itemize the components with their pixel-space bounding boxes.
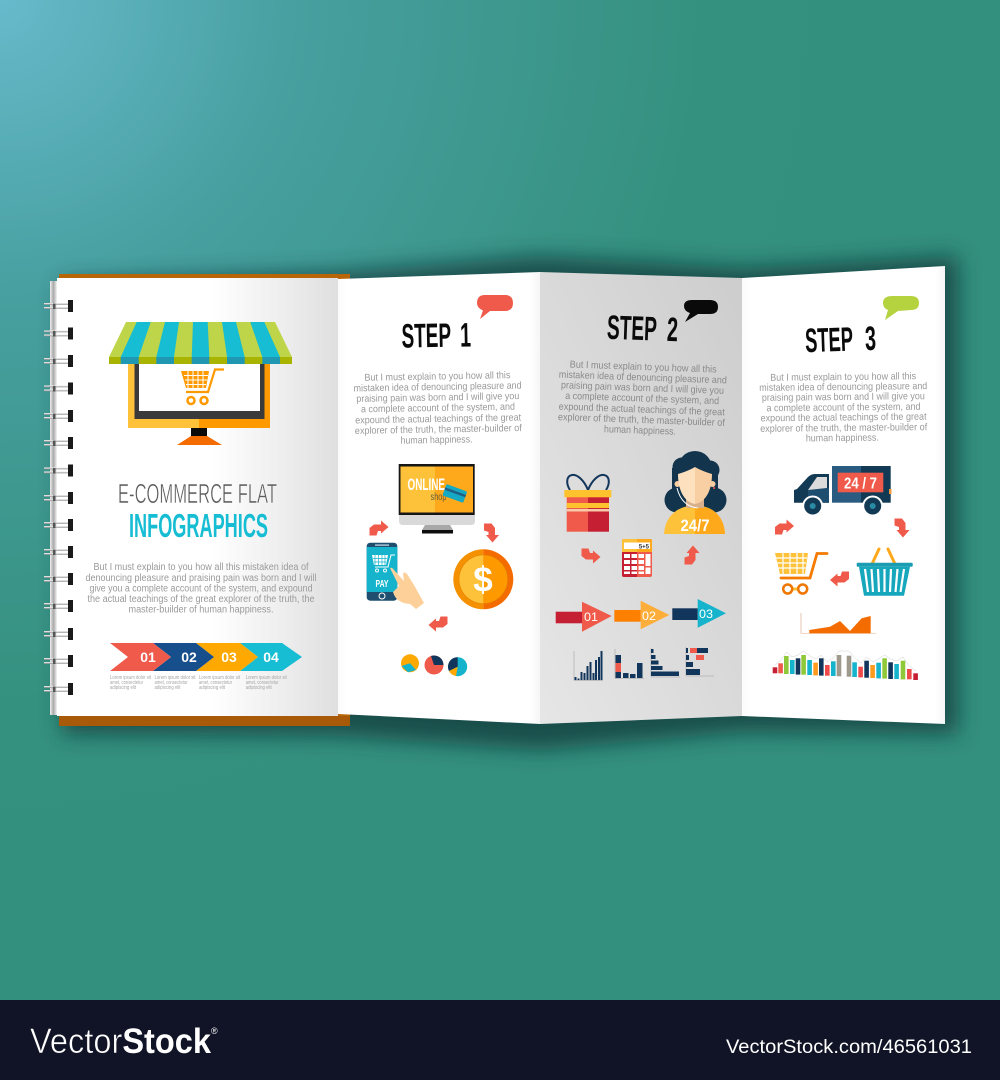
heading: step 2: STEP (606, 309, 658, 349)
spiral binding (44, 300, 73, 695)
pie charts (401, 654, 467, 676)
icon: shop monitor (109, 322, 292, 445)
text block: step 3 (759, 371, 928, 445)
arrow (830, 572, 849, 586)
text block: step 3: mistaken idea of denouncing pleasure and (759, 381, 927, 394)
chevron captions: Lorem ipsum dolor sit (110, 675, 152, 681)
numbered arrow 02: 02 (642, 609, 656, 623)
numbered arrow 01 (556, 602, 612, 632)
icon: calculator: 5+5 (639, 544, 650, 550)
icon: green speech bubble (883, 296, 919, 320)
heading: step 3: STEP (804, 321, 854, 360)
arrow (684, 546, 700, 564)
icon: phone with hand: PAY (376, 579, 389, 590)
text block: step 2: a complete account of the system, and (565, 391, 719, 407)
text block: intro: give you a complete account of the system, and expound (90, 584, 312, 594)
icon: cart (181, 370, 224, 404)
logo registered mark: ® (211, 1026, 218, 1036)
footer bar (0, 1000, 1000, 1080)
icon: support agent (664, 451, 726, 535)
chevron steps: 01 (140, 649, 156, 665)
image id: VectorStock.com/46561031 (726, 1036, 972, 1058)
panel: step 1 (338, 272, 540, 724)
icon: online shop monitor: ONLINE (408, 476, 445, 494)
chevron captions: adipiscing elit (154, 685, 181, 691)
text block: step 1: a complete account of the system, and (361, 402, 515, 415)
bar chart 2 (615, 649, 644, 678)
icon: calculator (622, 539, 652, 577)
text block: intro (86, 562, 316, 616)
text block: step 3: expound the actual teachings of the great (761, 412, 927, 424)
text block: step 1: human happiness. (400, 434, 473, 447)
chevron steps (110, 643, 302, 671)
left page (57, 278, 338, 716)
chevron captions: adipiscing elit (110, 685, 137, 691)
icon: black speech bubble (684, 300, 718, 322)
numbered arrow 03: 03 (699, 607, 713, 621)
chevron captions: amet, consectetur (199, 680, 232, 686)
icon: hand (390, 568, 424, 609)
chevron captions: amet, consectetur (154, 680, 188, 686)
icon: dollar coin: $ (473, 560, 493, 600)
logo: VectorStock: VectorStock (30, 1022, 211, 1061)
text block: intro: the actual teachings of the great explorer of the truth, the (88, 594, 315, 605)
icon: gift (564, 475, 611, 532)
icon: dollar coin (453, 549, 513, 609)
text block: step 1: explorer of the truth, the master-builder of (355, 423, 522, 437)
text block: step 3: a complete account of the system, and (766, 402, 921, 414)
numbered arrow 03 (672, 599, 726, 628)
heading: step 1: 1 (460, 316, 471, 355)
text block: step 2: expound the actual teachings of the great (559, 402, 725, 418)
chevron captions: amet, consectetur (110, 680, 143, 686)
icon: basket (857, 549, 913, 596)
icon: online shop monitor: shop (430, 492, 447, 503)
text block: intro: But I must explain to you how all this mistaken idea of (94, 562, 309, 573)
heading: infographics: INFOGRAPHICS (129, 507, 268, 544)
icon: awning (109, 322, 292, 364)
notebook cover (59, 274, 350, 726)
icon: online shop monitor (399, 464, 475, 534)
icon: delivery truck (794, 466, 892, 516)
page stack (50, 281, 57, 715)
text block: step 3: human happiness. (806, 433, 879, 444)
chevron steps: 04 (263, 649, 279, 665)
text block: step 2: But I must explain to you how all this (570, 359, 717, 376)
icon: shopping cart (775, 553, 827, 594)
panel: step 3 (742, 266, 945, 724)
arrow (370, 520, 388, 536)
text block: step 2 (557, 359, 727, 439)
chevron captions: Lorem ipsum dolor sit (246, 675, 287, 681)
brochure shadow (62, 256, 958, 750)
arrow (775, 520, 794, 534)
heading: step 2: 2 (666, 311, 679, 349)
icon: support agent: 24/7 (680, 516, 710, 535)
heading: step 1: STEP (401, 317, 451, 356)
chevron captions: amet, consectetur (246, 680, 279, 686)
bar chart 4 (686, 647, 714, 676)
icon: red speech bubble (477, 295, 513, 319)
arrow (484, 524, 499, 542)
notebook (44, 274, 350, 726)
chevron captions: Lorem ipsum dolor sit (199, 675, 241, 681)
chevron captions: Lorem ipsum dolor sit (154, 675, 196, 681)
chevron captions: adipiscing elit (246, 685, 272, 691)
chevron captions (110, 675, 287, 691)
area chart (801, 613, 876, 634)
bar chart: multicolor (773, 651, 918, 680)
bar chart 3 (651, 648, 680, 677)
text block: intro: master-builder of human happiness. (128, 604, 274, 616)
text block: step 2: human happiness. (604, 424, 676, 438)
text block: step 3: But I must explain to you how all this (770, 371, 916, 384)
icon: phone with hand (367, 543, 424, 609)
arrow (894, 518, 910, 538)
icon: delivery truck: 24 / 7 (844, 476, 877, 492)
arrow (582, 548, 600, 564)
text block: step 1 (353, 370, 523, 447)
text block: step 2: praising pain was born and I will give you (561, 380, 724, 397)
arrow (428, 616, 448, 632)
text block: step 1: mistaken idea of denouncing pleasure and (354, 381, 522, 394)
chevron steps: 02 (181, 649, 197, 665)
heading: e-commerce flat: E-COMMERCE FLAT (118, 478, 277, 509)
numbered arrow 01: 01 (584, 610, 598, 624)
chevron steps: 03 (221, 649, 237, 665)
text block: step 1: praising pain was born and I will give you (356, 391, 519, 405)
panel: step 2 (540, 272, 742, 724)
text block: step 1: expound the actual teachings of the great (355, 413, 521, 426)
text block: intro: denouncing pleasure and praising pain was born and I will (86, 573, 316, 584)
text block: step 1: But I must explain to you how all this (364, 370, 511, 384)
numbered arrow 02 (614, 601, 669, 629)
bar chart 1 (574, 651, 603, 680)
heading: step 3: 3 (864, 320, 877, 358)
chevron captions: adipiscing elit (199, 685, 226, 691)
text block: step 2: mistaken idea of denouncing pleasure and (559, 370, 727, 386)
text block: step 3: explorer of the truth, the master-builder of (760, 422, 927, 435)
text block: step 3: praising pain was born and I will give you (762, 391, 925, 404)
text block: step 2: explorer of the truth, the master-builder of (558, 412, 725, 429)
